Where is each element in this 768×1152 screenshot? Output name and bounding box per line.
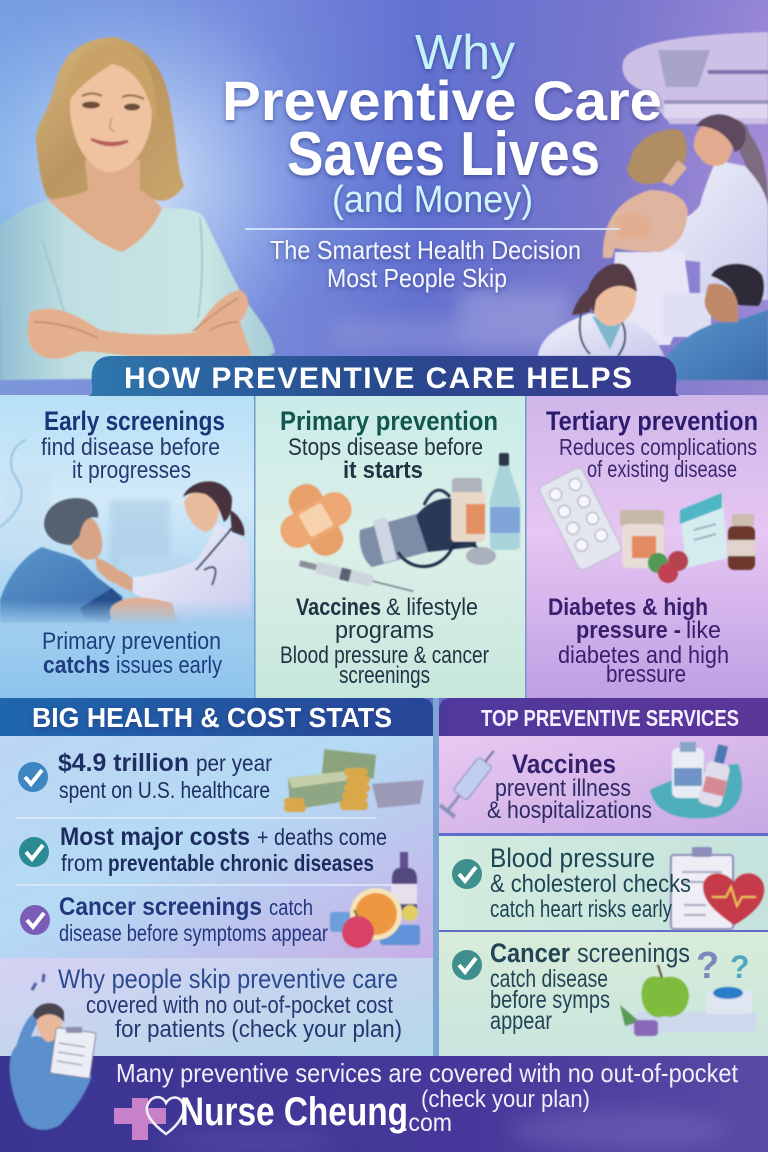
text: primary prevention outcome: screenings bbox=[339, 662, 430, 689]
portrait fade bbox=[0, 600, 254, 626]
text: blood pressure: Blood pressure bbox=[490, 843, 655, 873]
stat: cancer screenings bbox=[59, 893, 328, 946]
paper stack bbox=[663, 293, 711, 337]
text: early screenings detail: find disease before bbox=[41, 434, 220, 461]
text: early screenings outcome: catchs bbox=[43, 652, 110, 679]
panel: why people skip preventive care bbox=[0, 958, 433, 1056]
patient back bbox=[603, 190, 688, 258]
nurse ponytail bbox=[725, 118, 768, 210]
text: tertiary prevention outcome bbox=[548, 594, 729, 688]
text: primary prevention outcome bbox=[280, 594, 489, 689]
title: Saves Lives bbox=[287, 120, 600, 189]
illustration: patient and doctor bbox=[0, 481, 252, 623]
subtitle: Most People Skip bbox=[327, 263, 507, 293]
title bbox=[222, 26, 662, 221]
woman features bbox=[82, 94, 144, 145]
header: big health and cost stats: BIG HEALTH & COST STATS bbox=[32, 702, 392, 733]
mammography machine bbox=[622, 32, 768, 124]
text: why people skip detail: for patients (check your plan) bbox=[115, 1016, 402, 1043]
hero background bbox=[0, 0, 768, 400]
stat: 4.9 trillion bbox=[58, 749, 272, 803]
stat: 4.9 trillion: per year bbox=[196, 750, 272, 776]
worry marks bbox=[32, 974, 44, 990]
text: tertiary prevention outcome: like bbox=[686, 617, 721, 644]
title: Preventive Care bbox=[222, 69, 662, 132]
text: cancer screenings: before symps bbox=[490, 986, 610, 1014]
doctor coat bbox=[133, 523, 252, 623]
doctor head bbox=[184, 491, 219, 532]
illustration: bottle and fruit bbox=[330, 852, 420, 948]
decorative rule bbox=[245, 228, 620, 230]
icon: heart outline bbox=[147, 1097, 184, 1134]
icon: apple, scale and question marks bbox=[620, 965, 756, 1036]
man face bbox=[705, 284, 738, 322]
text: early screenings outcome bbox=[42, 628, 222, 679]
illustration: apples bbox=[648, 551, 688, 583]
icon: question marks bbox=[696, 945, 750, 987]
nurse face bbox=[37, 1014, 62, 1042]
illustration: water bottle bbox=[490, 453, 520, 550]
woman shirt bbox=[0, 200, 275, 380]
title: (and Money) bbox=[332, 179, 533, 221]
text: primary prevention detail bbox=[288, 434, 483, 484]
woman sleeve seams bbox=[42, 218, 202, 318]
text: tertiary prevention detail bbox=[559, 434, 757, 482]
icon: stethoscope tube bbox=[0, 440, 26, 527]
nurse head bbox=[694, 121, 733, 166]
logo: nurse cheung bbox=[114, 1090, 452, 1140]
doctor face bbox=[592, 284, 636, 326]
man shirt bbox=[667, 310, 768, 380]
text: tertiary prevention outcome: pressure - bbox=[576, 617, 681, 644]
woman neck and chest bbox=[48, 160, 162, 252]
nurse coat bbox=[646, 160, 768, 300]
text: vaccines: Vaccines bbox=[512, 749, 616, 779]
text: why people skip detail: covered with no out-of-pocket cost bbox=[86, 992, 393, 1019]
man hair bbox=[711, 264, 764, 306]
text: early screenings outcome: Primary prevention bbox=[42, 628, 221, 655]
icon: question marks: ? bbox=[696, 945, 719, 987]
woman crossed arms bbox=[28, 290, 252, 359]
text: vaccines: & hospitalizations bbox=[487, 797, 652, 824]
text: early screenings detail: it progresses bbox=[72, 457, 191, 484]
doctor coat bbox=[538, 313, 664, 356]
patient hand bbox=[615, 212, 652, 238]
nurse scrubs bbox=[10, 1036, 92, 1130]
text: tertiary prevention outcome: Diabetes & high bbox=[548, 594, 708, 621]
stat: major costs: + deaths come bbox=[257, 824, 387, 850]
patient shirt bbox=[0, 547, 123, 623]
text: primary prevention heading: Primary prevention bbox=[280, 406, 498, 436]
stat: cancer screenings: catch bbox=[269, 895, 313, 920]
stat: 4.9 trillion: $4.9 trillion bbox=[58, 749, 189, 777]
text: vaccines: prevent illness bbox=[495, 775, 631, 802]
subtitle: The Smartest Health Decision bbox=[270, 235, 581, 265]
service: vaccines bbox=[439, 736, 768, 833]
text: coverage note bbox=[116, 1058, 739, 1113]
illustration: worried nurse with clipboard bbox=[10, 974, 96, 1130]
text: blood pressure: catch heart risks early bbox=[490, 896, 672, 923]
text: early screenings heading: Early screenings bbox=[44, 406, 225, 436]
text: coverage note: (check your plan) bbox=[421, 1086, 590, 1113]
text: tertiary prevention outcome: diabetes and high bbox=[558, 642, 729, 669]
icon: check teal bbox=[19, 837, 49, 867]
blood pressure cuff bbox=[80, 588, 123, 623]
illustration: medicine box bbox=[680, 493, 728, 568]
service: cancer screenings bbox=[439, 932, 768, 1056]
icon: check purple bbox=[20, 905, 50, 935]
text: cancer screenings: catch disease bbox=[490, 965, 608, 993]
text: blood pressure bbox=[490, 843, 691, 923]
text: primary prevention detail: Stops disease before bbox=[288, 434, 483, 461]
woman face bbox=[70, 64, 152, 172]
text: blood pressure: & cholesterol checks bbox=[490, 870, 691, 898]
title: Why bbox=[415, 26, 516, 80]
illustration: amber bottle bbox=[728, 514, 755, 570]
heading: how preventive care helps: HOW PREVENTIVE CARE HELPS bbox=[124, 362, 632, 395]
text: vaccines bbox=[487, 749, 652, 824]
panel: primary prevention bbox=[255, 395, 525, 698]
text: primary prevention outcome: & lifestyle bbox=[386, 594, 478, 621]
text: cancer screenings: Cancer bbox=[490, 938, 570, 968]
doctor hair bbox=[586, 263, 637, 312]
hero photo: smiling woman with crossed arms bbox=[0, 37, 275, 380]
stat: major costs: from bbox=[61, 850, 103, 876]
text: primary prevention outcome: programs bbox=[335, 617, 434, 644]
doctor hands bbox=[95, 557, 133, 592]
icon: check teal bbox=[452, 859, 482, 889]
text: why people skip detail bbox=[86, 992, 402, 1043]
text: brand name: Nurse Cheung bbox=[180, 1090, 408, 1134]
illustration: cash and coins bbox=[284, 749, 424, 812]
column gutter bbox=[433, 698, 439, 1056]
nurse clipboard bbox=[50, 1027, 96, 1079]
text: cancer screenings: appear bbox=[490, 1007, 552, 1035]
subtitle bbox=[270, 235, 581, 293]
text: why people skip heading: Why people skip preventive care bbox=[58, 964, 398, 994]
stat: cancer screenings: Cancer screenings bbox=[59, 893, 262, 921]
icon: clipboard and heart bbox=[671, 847, 764, 929]
illustration: vial bbox=[451, 478, 485, 542]
woman hair bbox=[36, 37, 184, 201]
text: brand domain: .com bbox=[402, 1109, 452, 1137]
icon: medical plus bbox=[114, 1098, 166, 1140]
icon: check teal bbox=[452, 950, 482, 980]
text: primary prevention outcome: Vaccines bbox=[296, 594, 381, 621]
panel: big health and cost stats bbox=[0, 698, 433, 958]
text: early screenings outcome: issues early bbox=[116, 652, 222, 679]
text: cancer screenings: screenings bbox=[577, 938, 690, 968]
section: top preventive services bbox=[439, 698, 768, 1056]
icon: vials on tray bbox=[650, 742, 742, 818]
woman fringe bbox=[64, 42, 156, 125]
icon: question marks: ? bbox=[730, 949, 750, 985]
stat: cancer screenings: disease before symptoms appear bbox=[59, 920, 328, 946]
patient hair bbox=[627, 129, 687, 184]
text: tertiary prevention outcome: bressure bbox=[606, 661, 686, 688]
icon: syringe bbox=[439, 745, 502, 818]
illustration: blister pack bbox=[538, 466, 623, 572]
stat: major costs: preventable chronic diseases bbox=[108, 850, 374, 876]
panel: early screenings bbox=[0, 395, 254, 698]
illustration: pill jar bbox=[620, 510, 664, 568]
stat: 4.9 trillion: spent on U.S. healthcare bbox=[59, 777, 270, 803]
panel dividers bbox=[254, 395, 526, 698]
patient gown bbox=[612, 252, 690, 345]
illustration: bandages bbox=[275, 478, 357, 562]
stat: major costs: Most major costs bbox=[60, 823, 250, 851]
footer band bbox=[0, 1056, 768, 1152]
text: primary prevention detail: it starts bbox=[343, 457, 423, 484]
stat: major costs bbox=[60, 823, 387, 876]
hero photo: mammography and consultation scene bbox=[538, 32, 768, 380]
header: top preventive services bbox=[439, 698, 768, 736]
clinic backdrop bbox=[0, 470, 190, 575]
text: early screenings detail bbox=[41, 434, 220, 484]
icon: check blue bbox=[18, 762, 48, 792]
doctor ponytail bbox=[572, 288, 590, 315]
patient head bbox=[72, 516, 102, 560]
illustration: blood pressure monitor bbox=[360, 490, 496, 567]
service: blood pressure bbox=[439, 836, 768, 930]
text: cancer screenings bbox=[490, 938, 690, 1035]
panel: tertiary prevention bbox=[526, 395, 768, 698]
stat row dividers bbox=[16, 817, 416, 886]
text: primary prevention outcome: Blood pressure & cancer bbox=[280, 642, 489, 669]
nurse hair bbox=[33, 1003, 64, 1022]
illustration: syringe bbox=[298, 557, 415, 597]
